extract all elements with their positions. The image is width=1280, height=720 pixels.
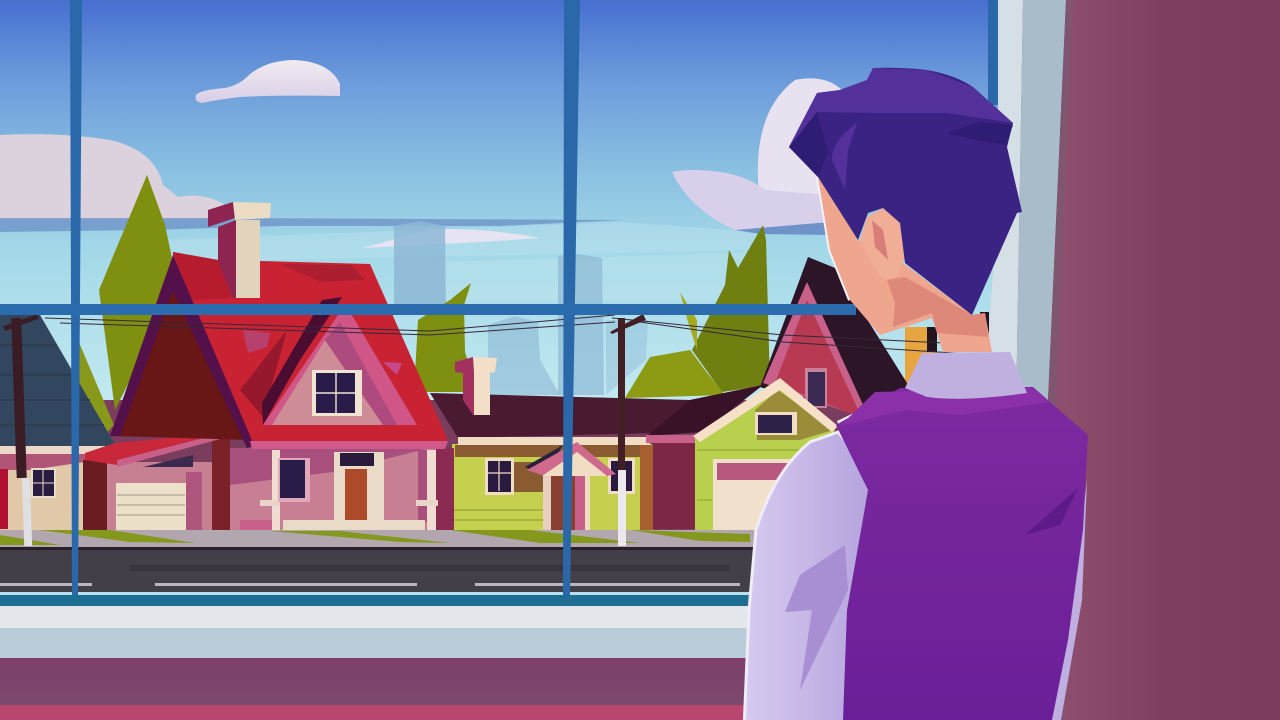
- vest top band: [840, 388, 1050, 426]
- green house: [430, 357, 763, 530]
- dormer: [240, 297, 417, 425]
- shirt sleeve: [744, 432, 880, 720]
- man: [744, 68, 1088, 720]
- sidewalk and lawn: [0, 530, 760, 549]
- sleeve folds: [785, 545, 848, 690]
- sky light bands: [160, 222, 760, 300]
- face and neck: [818, 177, 992, 352]
- window glass bottom band: [0, 592, 755, 607]
- hair streak: [832, 123, 857, 190]
- red house with garage: [83, 202, 454, 530]
- hair highlight: [789, 68, 1013, 147]
- face outline: [818, 177, 850, 300]
- window side frame: [985, 0, 1068, 410]
- hair: [789, 68, 1022, 315]
- hair underside shadow: [789, 112, 828, 177]
- main roof: [173, 252, 447, 448]
- hair curl shadow: [947, 122, 1013, 145]
- chimney: [208, 202, 271, 298]
- right green house with garage: [693, 378, 838, 530]
- ground floor: [230, 441, 454, 530]
- road: [0, 547, 760, 595]
- utility wires: [45, 315, 985, 355]
- utility pole centre: [610, 314, 646, 546]
- curtain: [1048, 0, 1280, 720]
- back red house: [760, 257, 989, 420]
- roof patches: [243, 330, 270, 353]
- utility pole left: [3, 314, 39, 546]
- gable end: [110, 255, 254, 448]
- small porch: [525, 442, 616, 530]
- left blue house: [0, 315, 117, 530]
- vest highlight edge: [837, 392, 905, 428]
- vest: [836, 387, 1088, 720]
- vest fold: [1025, 488, 1078, 535]
- clouds: [0, 60, 842, 248]
- window frame bars: [0, 0, 998, 595]
- ear inner: [872, 220, 888, 260]
- trees: [78, 175, 770, 440]
- neck shadow: [887, 277, 988, 337]
- right sleeve: [1050, 480, 1087, 720]
- ear: [860, 208, 905, 280]
- window sill: [0, 606, 760, 720]
- skyline: [394, 221, 648, 395]
- collar: [905, 352, 1027, 399]
- sky: [0, 0, 1000, 400]
- garage: [83, 433, 230, 530]
